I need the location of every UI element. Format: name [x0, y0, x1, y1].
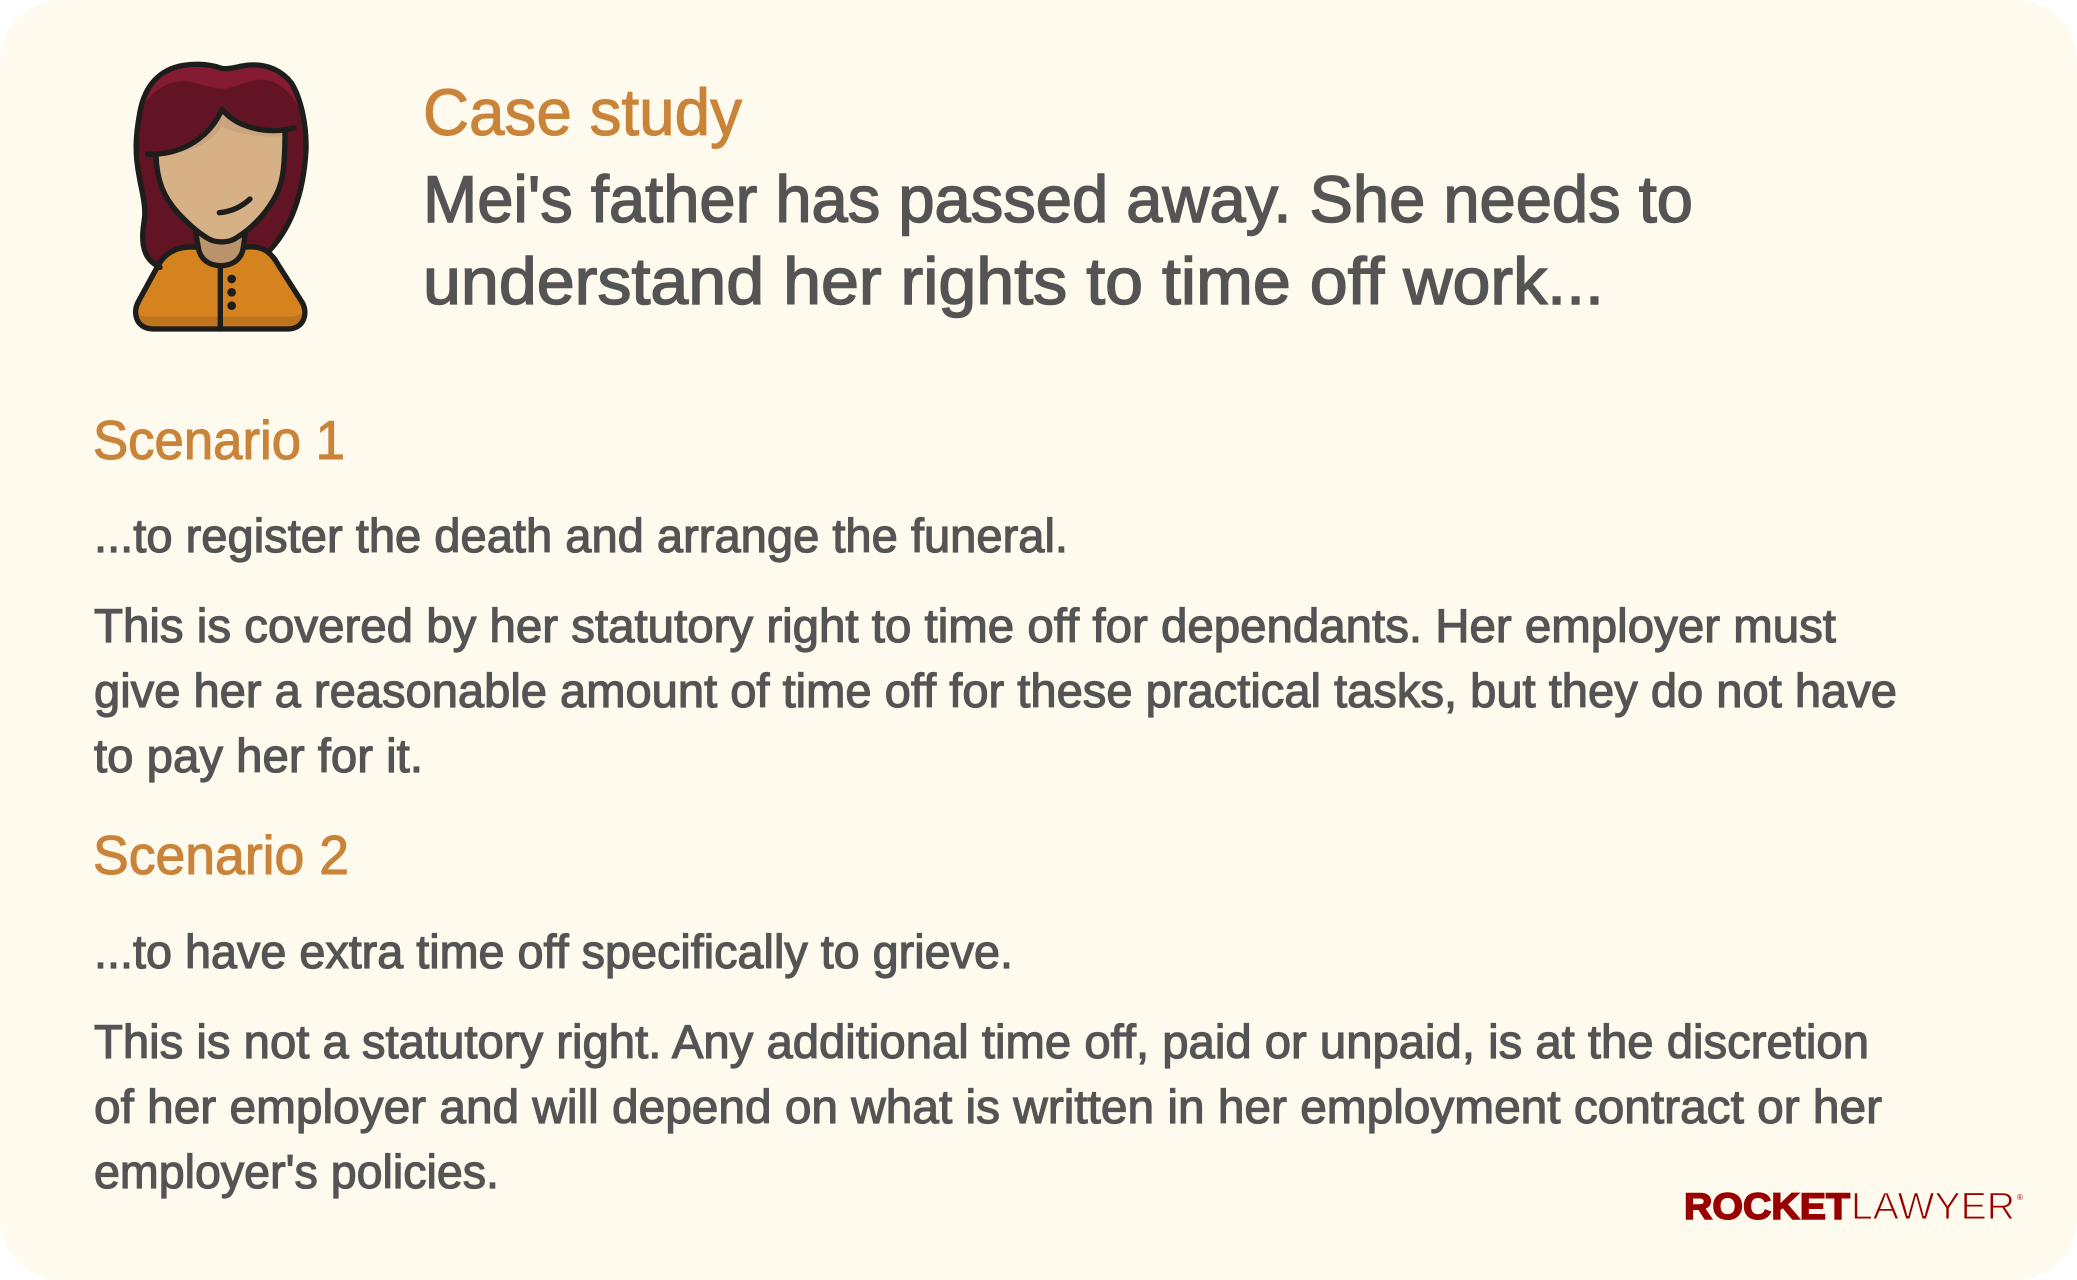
- logo: Rocket Lawyer: ROCKET: [1684, 1185, 1850, 1227]
- heading: scenario 1: Scenario 1: [93, 409, 345, 471]
- text: scenario 1 body: to pay her for it.: [94, 729, 423, 782]
- text: scenario 1 body: This is covered by her statutory right to time off for dependants. Her employer must: [94, 599, 1836, 652]
- logo: Rocket Lawyer: [1684, 1185, 2023, 1228]
- text: scenario 2 body: [94, 1015, 1882, 1198]
- heading: case description: understand her rights to time off work...: [423, 244, 1604, 318]
- heading: case description: [423, 162, 1693, 318]
- text: scenario 2 body: of her employer and will depend on what is written in her employment contract or her: [94, 1080, 1882, 1133]
- text: scenario 2 body: This is not a statutory right. Any additional time off, paid or unpaid, is at the discretion: [94, 1015, 1869, 1068]
- text: scenario 2 intro: ...to have extra time off specifically to grieve.: [94, 925, 1013, 978]
- heading: case description: Mei's father has passed away. She needs to: [423, 162, 1693, 236]
- heading: scenario 2: Scenario 2: [93, 824, 349, 886]
- text: scenario 1 body: [94, 599, 1897, 782]
- title: case study: Case study: [423, 75, 742, 149]
- text: scenario 1 body: give her a reasonable amount of time off for these practical tasks, but they do not have: [94, 664, 1897, 717]
- icon: woman portrait: [135, 64, 306, 329]
- text: scenario 1 intro: ...to register the death and arrange the funeral.: [94, 509, 1068, 562]
- text: scenario 2 body: employer's policies.: [94, 1145, 499, 1198]
- logo: Rocket Lawyer: ®: [2017, 1193, 2023, 1202]
- logo: Rocket Lawyer: LAWYER: [1851, 1186, 2015, 1228]
